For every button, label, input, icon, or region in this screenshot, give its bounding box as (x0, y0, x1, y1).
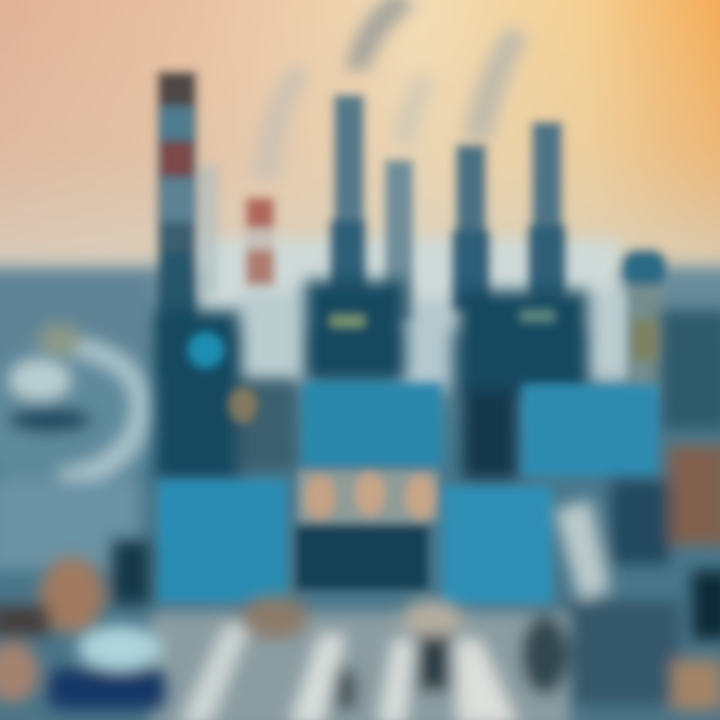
smoke plumes (252, 0, 528, 180)
chimney: small red striped (246, 198, 274, 288)
chimney: centre rear (385, 160, 413, 320)
left harbour swirl (0, 324, 160, 570)
chimney: far left tall striped (158, 72, 196, 375)
bottom foreground (150, 596, 570, 720)
panel: centre top (302, 382, 442, 466)
factory highlights (188, 310, 658, 423)
blue panels (158, 382, 658, 604)
right side brown buildings (555, 445, 720, 710)
sky background (0, 0, 720, 320)
centre block with tan figures (296, 470, 438, 590)
panel: lower centre (442, 486, 552, 604)
smokestacks (158, 72, 666, 395)
chimney: right pair (456, 145, 486, 305)
chimney: centre tall (334, 95, 364, 285)
dark factory blocks (155, 280, 720, 480)
panel: right (522, 384, 658, 476)
left foreground objects (0, 540, 166, 710)
panel: lower left (158, 480, 286, 602)
ground background (0, 240, 720, 720)
tank: far right (622, 250, 666, 286)
